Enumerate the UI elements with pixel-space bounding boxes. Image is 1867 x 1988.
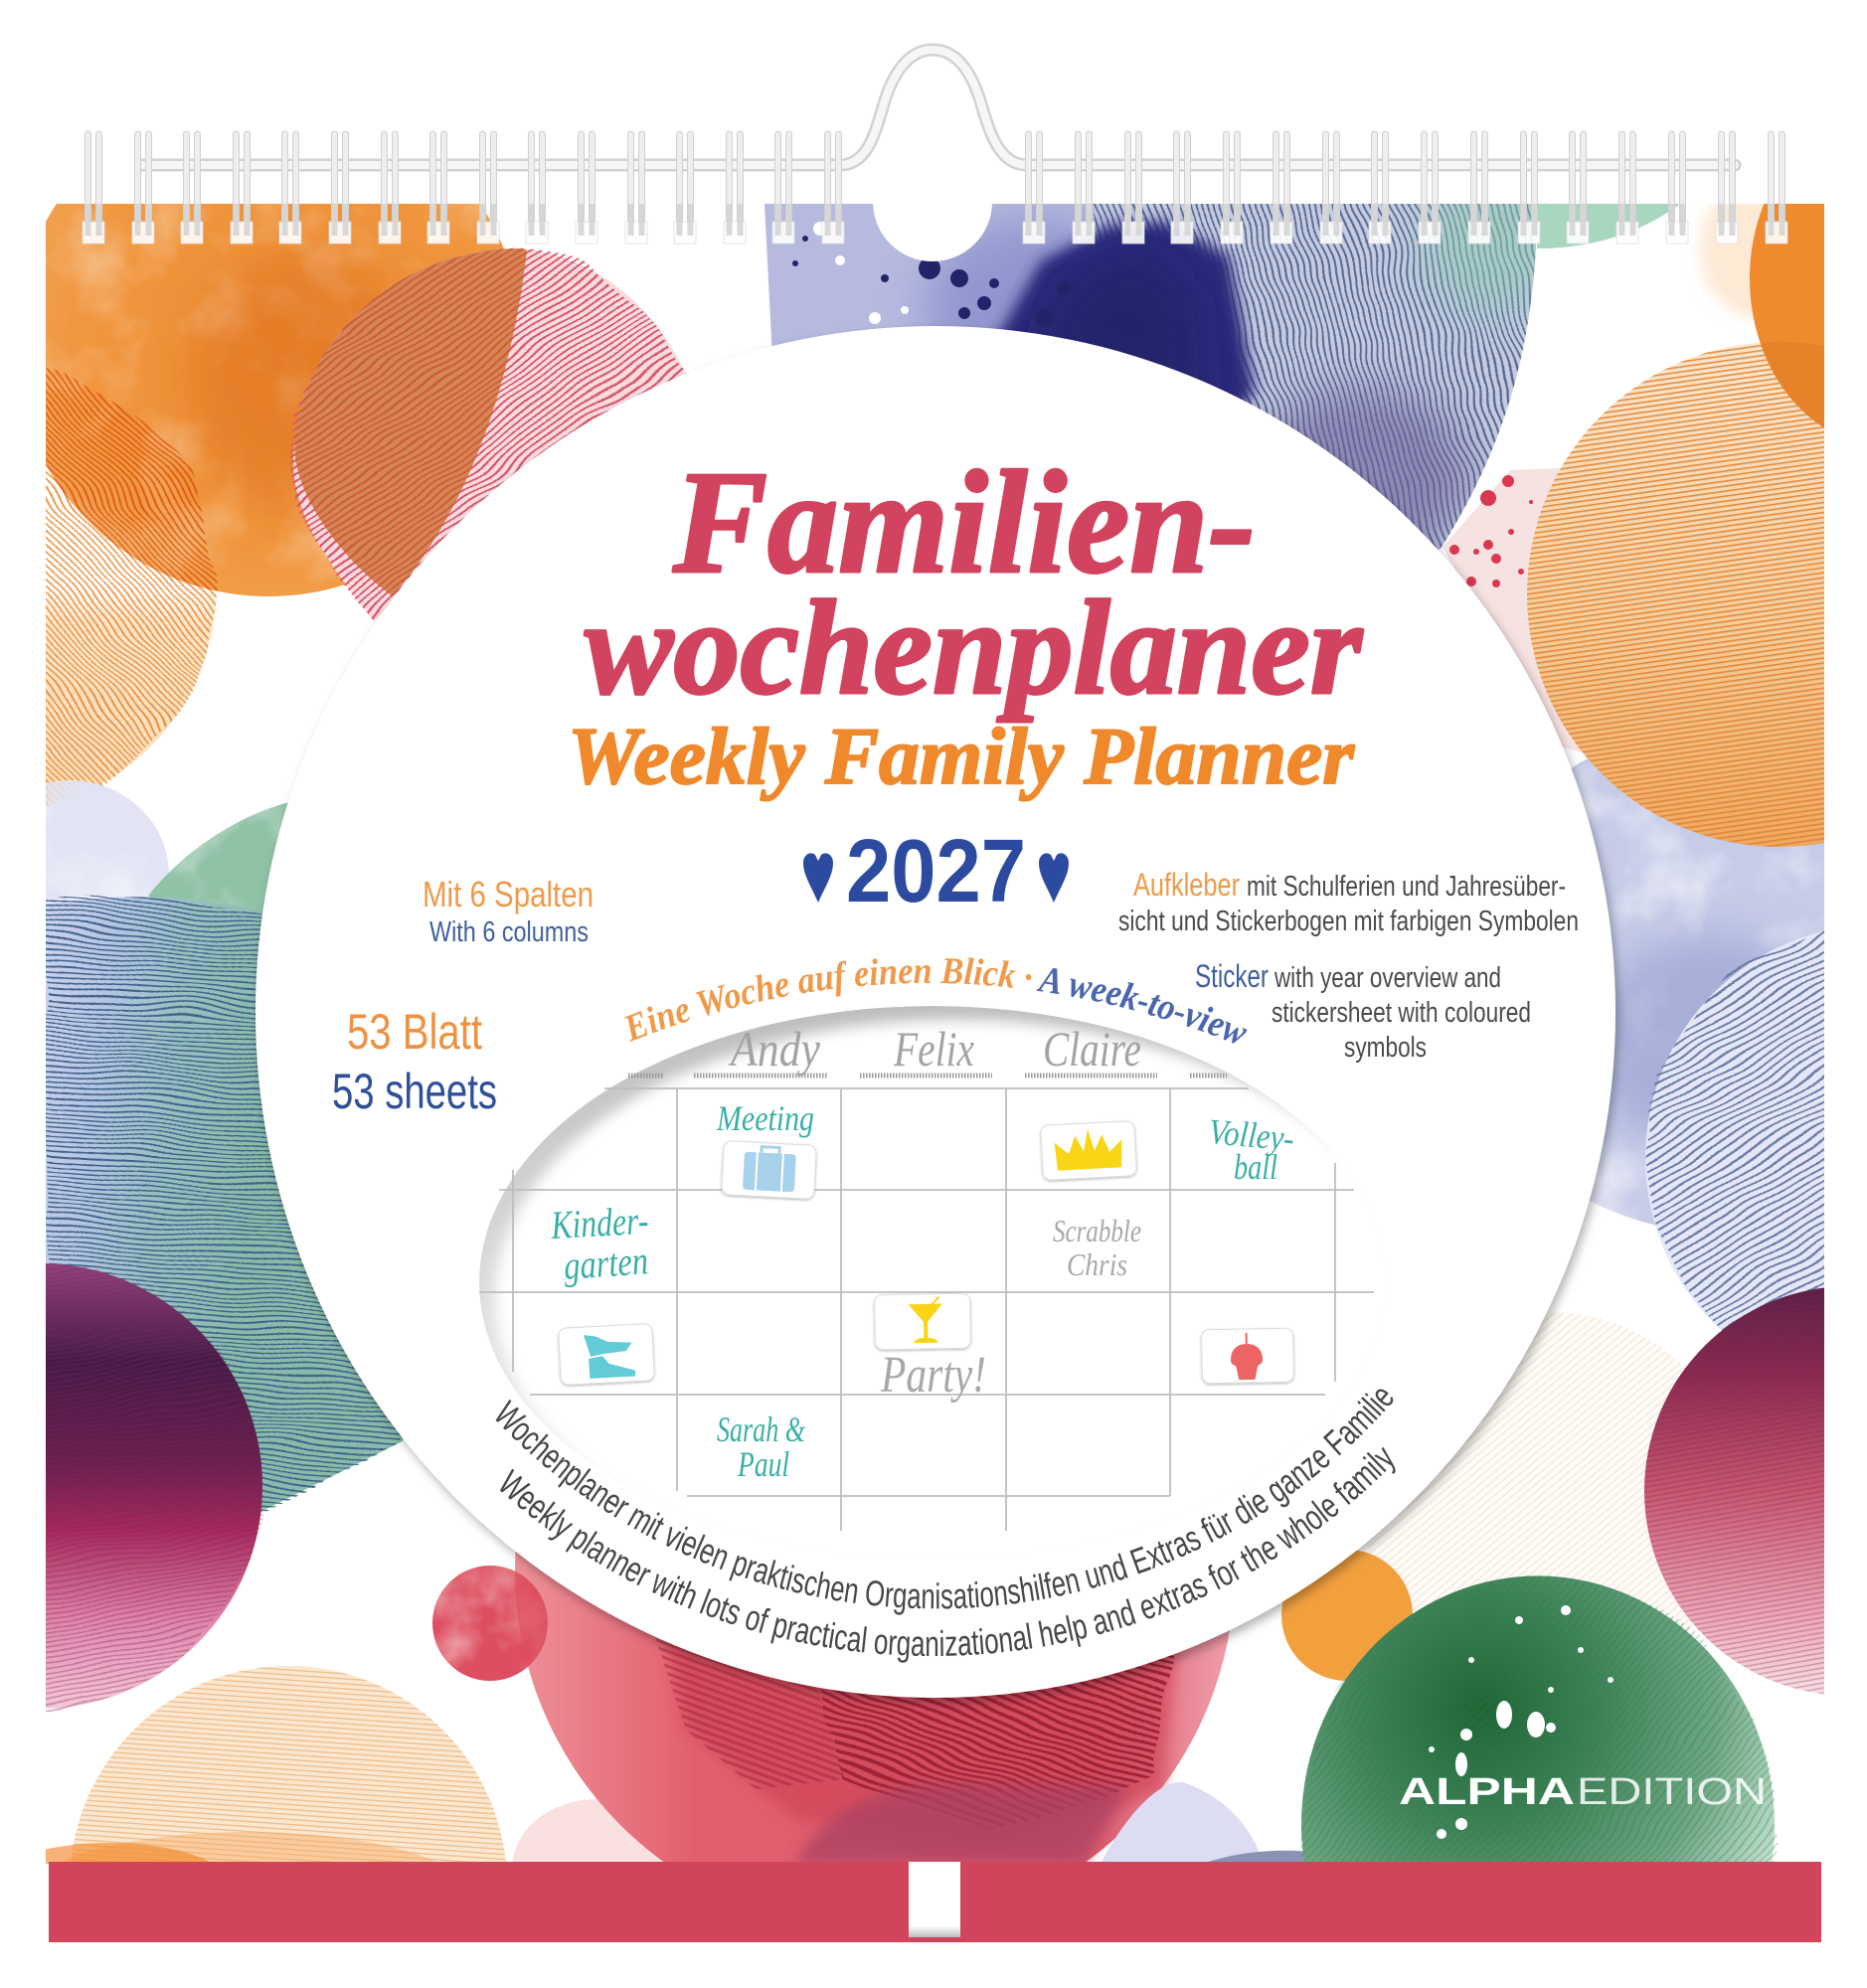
feature: English stickers: symbols [1344,1032,1427,1064]
watercolour: navy and lavender top area [764,204,1536,551]
feature: columns: With 6 columns [429,916,589,948]
subtitle: Weekly Family Planner [568,711,1355,801]
curved heading: Eine Woche auf einen Blick · A week-to-view [624,958,1247,1044]
teal entries: Meeting [716,1098,814,1138]
watercolour: small orange circle [1281,1550,1413,1681]
feature: columns [423,874,594,948]
feature: German stickers: Aufkleber [1133,867,1240,903]
feature: sheets: 53 Blatt [347,1004,482,1060]
sticker: cocktail [875,1293,970,1350]
teal entries: Volley- [1207,1111,1295,1158]
icon: left heart [803,853,833,903]
watercolour: blue-green striped fan [46,897,437,1513]
teal entries: ball [1234,1147,1277,1187]
watercolour: plum circle [46,1262,264,1712]
curved tagline English: Weekly planner with lots of practical organizational help and extras for the whole family [500,1447,1396,1663]
watercolour: cream striped circle [1368,1312,1694,1631]
grey entries: Scrabble [1053,1213,1141,1248]
feature: German stickers [1118,867,1579,937]
curved tagline German: Wochenplaner mit vielen praktischen Organisationshilfen und Extras für die ganze Familie [495,1390,1394,1615]
feature: sheets: 53 sheets [332,1064,497,1119]
arc paths for taglines [492,983,1402,1656]
watercolour: pale peach top right [1694,204,1764,323]
watercolour: pale pink lump [513,1799,664,1862]
watercolour: big red bowl [515,1551,1230,1862]
teal entries: Kinder- [549,1198,649,1247]
watercolour: green wedge top right [1537,204,1680,248]
feature: English stickers: with year overview and [1273,962,1501,994]
hanger wire [142,50,1735,165]
logo [1399,1771,1767,1813]
feature: English stickers [1195,958,1531,1064]
logo: EDITION [1577,1771,1767,1813]
feature: English stickers: stickersheet with coloured [1272,997,1531,1029]
top notch in page [873,142,992,261]
watercolour: lavender blob right [1571,758,1824,1225]
feature: columns: Mit 6 Spalten [423,874,594,914]
teal entries [549,1098,1295,1484]
teal entries: Paul [737,1444,789,1484]
watercolour: lavender blob left [46,780,169,905]
calendar window preview [479,1006,1414,1576]
sticker: sneakers [559,1324,654,1385]
watercolour: plum wash at bowl base [795,1783,1128,1864]
watercolour: big peach striped circle [1527,342,1824,847]
sticker: crown [1041,1121,1136,1180]
main white circle [255,326,1615,1698]
feature: sheets [332,1004,497,1119]
grey entries: Party! [880,1347,986,1404]
watercolour: blue lines bottom [1203,1851,1362,1864]
watercolour: striped peach circle left [46,368,218,807]
watercolour: orange circle top right [1750,204,1824,428]
window shadow crescent [479,1006,1414,1576]
watercolour: red splash [1443,467,1591,755]
dotted name lines [628,1074,1227,1077]
watercolour: lavender lump bottom [1101,1782,1263,1864]
watercolour: blue striped circle right [1645,930,1824,1330]
watercolour: small red circle [432,1566,548,1681]
feature: German stickers: sicht und Stickerbogen mit farbigen Symbolen [1118,906,1579,937]
hanging slot [909,1862,960,1937]
watercolour: big orange circle [46,204,504,596]
column names: Claire [1043,1021,1141,1077]
teal entries: garten [562,1238,649,1288]
spiral binding [83,131,1787,244]
watercolour: green wedge [149,802,288,911]
page background watercolour artwork [46,204,1824,1864]
column names: Felix [893,1021,974,1077]
bottom colour bar [49,1862,1821,1942]
grey entries: Chris [1067,1246,1127,1282]
sticker: cupcake [1202,1328,1293,1384]
speckles on lavender [792,222,1071,327]
logo: ALPHA [1399,1771,1575,1813]
year with hearts [803,822,1069,921]
watercolour: striped red fan [293,248,685,621]
grey entries [880,1213,1141,1404]
feature: English stickers: Sticker [1195,958,1269,994]
watercolour: plum circle right [1644,1288,1824,1694]
column names: Andy [728,1021,821,1077]
icon: right heart [1039,853,1069,903]
planner grid [479,1088,1374,1531]
watercolour: green egg [1301,1575,1775,1864]
title [585,441,1363,723]
year: 2027 [846,822,1026,921]
feature: German stickers: mit Schulferien und Jahresüber- [1247,871,1566,903]
sticker: suitcase [722,1141,816,1199]
watercolour: peach striped dome bottom left [46,1666,506,1864]
title line 2: wochenplaner [585,574,1363,723]
teal entries: Sarah & [717,1409,805,1449]
column names [728,1021,1141,1077]
title line 1: Familien- [672,441,1256,604]
